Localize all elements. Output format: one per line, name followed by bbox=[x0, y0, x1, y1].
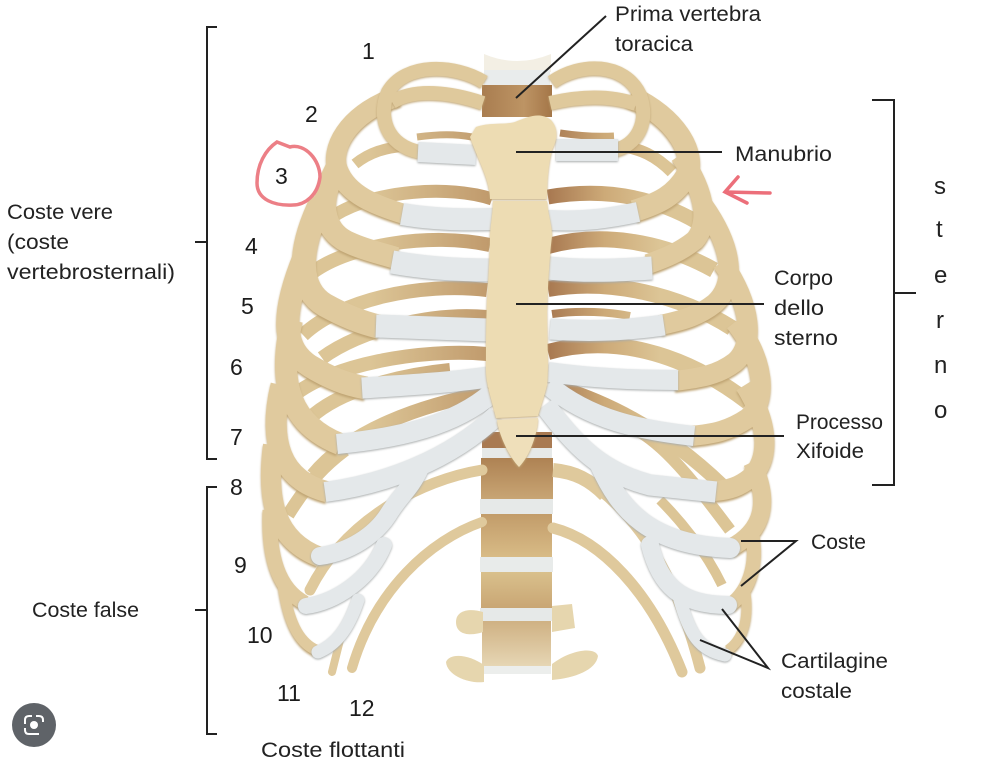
label: sterno vertical: e bbox=[934, 262, 947, 289]
label: coste vertebrosternali bbox=[7, 231, 175, 284]
rib numbers: 7 bbox=[230, 424, 243, 450]
bracket: coste false bbox=[195, 487, 217, 734]
rib numbers: 10 bbox=[247, 622, 273, 648]
illustration: rib cage bbox=[270, 54, 764, 682]
rib numbers: 5 bbox=[241, 293, 254, 319]
rib numbers: 1 bbox=[362, 38, 375, 64]
label: coste vere: Coste vere bbox=[7, 201, 113, 224]
leader: processo xifoide bbox=[516, 435, 784, 437]
label: coste: Coste bbox=[811, 531, 866, 554]
bracket: sterno bbox=[872, 100, 916, 485]
leader: cartilagine costale bbox=[700, 609, 768, 668]
label: corpo dello sterno: dello bbox=[774, 297, 824, 320]
spine: upper vertebrae bbox=[482, 54, 552, 117]
costal cartilage right bbox=[545, 150, 730, 655]
rib numbers: 11 bbox=[277, 680, 301, 706]
label: corpo dello sterno: sterno bbox=[774, 327, 838, 350]
xiphoid process bbox=[497, 418, 538, 467]
annotation: pink arrow bbox=[725, 177, 770, 203]
label: prima vertebra toracica: Prima vertebra bbox=[615, 3, 761, 26]
sternum bbox=[470, 116, 556, 467]
label: cartilagine costale bbox=[781, 650, 888, 703]
label: prima vertebra toracica bbox=[615, 3, 761, 56]
lower thin ribs bbox=[310, 470, 700, 672]
label: cartilagine costale: costale bbox=[781, 680, 852, 703]
back ribs right bbox=[548, 133, 748, 585]
label: sterno vertical: t bbox=[936, 216, 943, 243]
back ribs left bbox=[288, 135, 492, 515]
label: corpo dello sterno: Corpo bbox=[774, 267, 833, 290]
label: coste vertebrosternali: (coste bbox=[7, 231, 69, 254]
label: manubrio: Manubrio bbox=[735, 143, 832, 166]
rib numbers: 2 bbox=[305, 101, 318, 127]
side processes bbox=[446, 604, 598, 682]
rib numbers: 12 bbox=[349, 695, 375, 721]
label: corpo dello sterno bbox=[774, 267, 838, 350]
label: processo xifoide: Xifoide bbox=[796, 440, 864, 463]
annotation: pink circle around 3 bbox=[257, 142, 320, 205]
leader: prima vertebra bbox=[516, 16, 606, 98]
spine: lower vertebrae bbox=[480, 432, 553, 674]
label: sterno vertical: s bbox=[934, 173, 946, 200]
rib numbers: 9 bbox=[234, 552, 247, 578]
label: coste vertebrosternali: vertebrosternali) bbox=[7, 261, 175, 284]
label: processo xifoide: Processo bbox=[796, 411, 883, 434]
label: processo xifoide bbox=[796, 411, 883, 463]
rib numbers: 6 bbox=[230, 354, 243, 380]
label: sterno vertical: o bbox=[934, 397, 947, 424]
label: sterno vertical: n bbox=[934, 352, 947, 379]
leader: corpo dello sterno bbox=[516, 303, 764, 305]
label: sterno vertical: r bbox=[936, 307, 944, 334]
leader: coste bbox=[741, 541, 796, 586]
rib numbers: 8 bbox=[230, 474, 243, 500]
label: sterno vertical bbox=[934, 173, 947, 424]
leader: manubrio bbox=[516, 151, 722, 153]
manubrium bbox=[470, 116, 556, 199]
ribs right bbox=[630, 96, 764, 650]
bracket: coste vere bbox=[195, 27, 217, 459]
rib numbers bbox=[230, 38, 375, 721]
rib numbers: 4 bbox=[245, 233, 258, 259]
rib 1 left and right bbox=[384, 68, 643, 152]
label: coste false: Coste false bbox=[32, 599, 139, 622]
ribs left bbox=[270, 96, 404, 650]
label: prima vertebra toracica: toracica bbox=[615, 33, 693, 56]
costal cartilage left bbox=[306, 152, 497, 652]
label: cartilagine costale: Cartilagine bbox=[781, 650, 888, 673]
body of sternum bbox=[486, 201, 552, 418]
rib numbers: 3 bbox=[275, 163, 288, 189]
icon: lens button bbox=[12, 703, 56, 747]
